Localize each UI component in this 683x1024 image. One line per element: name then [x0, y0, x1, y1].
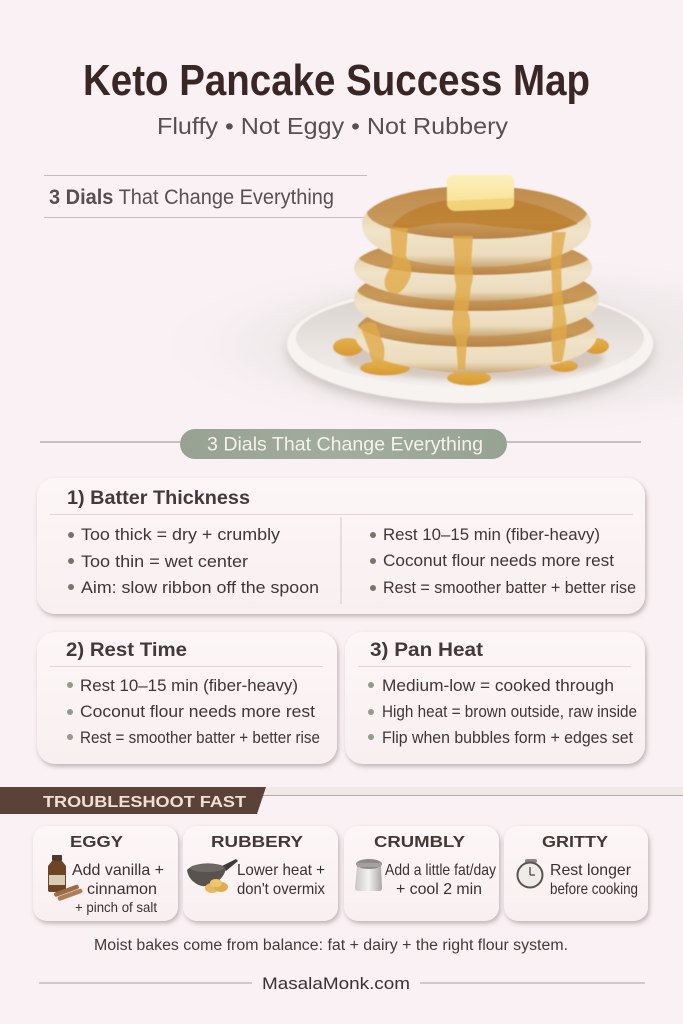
panel: rest time: 2) Rest Time — [66, 640, 187, 661]
pancake 4 — [355, 316, 598, 374]
syrup puddles — [333, 338, 609, 386]
footer: site name: MasalaMonk.com — [262, 974, 410, 993]
title: Keto Pancake Success Map — [83, 56, 590, 105]
pancake 3 — [354, 280, 600, 336]
card: rubbery: Lower heat + — [237, 862, 325, 879]
card: rubbery — [183, 826, 338, 921]
hero image: pancake stack on plate — [287, 175, 653, 403]
card: gritty: GRITTY — [542, 834, 608, 851]
panel: rest time: Rest 10–15 min (fiber-heavy) — [80, 677, 298, 695]
closing note: Moist bakes come from balance: fat + dairy + the right flour system. — [94, 937, 568, 954]
card: gritty — [504, 826, 648, 921]
card: crumbly: CRUMBLY — [374, 834, 465, 851]
panel: batter thickness: Coconut flour needs more rest — [383, 552, 614, 570]
card: eggy: + pinch of salt — [75, 899, 157, 915]
pancake 2 — [354, 248, 592, 302]
card: gritty: Rest longer — [550, 862, 632, 879]
panel: pan heat — [345, 632, 645, 764]
troubleshoot banner: TROUBLESHOOT FAST — [43, 794, 246, 811]
card: gritty: before cooking — [550, 881, 638, 898]
icon: timer — [518, 859, 542, 888]
icon: jar — [355, 859, 382, 891]
card: crumbly: + cool 2 min — [396, 881, 482, 898]
panel: batter thickness: Too thick = dry + crumbly — [81, 526, 281, 544]
panel: rest time — [37, 632, 337, 764]
panel: batter thickness: Too thin = wet center — [81, 553, 249, 571]
plate — [287, 285, 653, 403]
card: eggy — [33, 826, 178, 921]
icon: vanilla bottle and cinnamon — [48, 855, 83, 902]
section pill heading — [40, 429, 641, 459]
section pill heading: 3 Dials That Change Everything — [207, 434, 483, 456]
panel: pan heat: 3) Pan Heat — [370, 640, 484, 661]
icon: skillet with butter — [187, 859, 238, 893]
card: rubbery: RUBBERY — [211, 834, 303, 851]
panel: batter thickness: Rest = smoother batter + better rise — [383, 579, 636, 597]
card: eggy: Add vanilla + — [72, 862, 164, 879]
panel: pan heat: Medium-low = cooked through — [382, 677, 614, 695]
panel: batter thickness: Aim: slow ribbon off the spoon — [81, 579, 319, 597]
pancake 1 — [362, 185, 591, 267]
panel: rest time: Coconut flour needs more rest — [80, 703, 315, 721]
panel: batter thickness — [37, 478, 645, 614]
panel: pan heat: High heat = brown outside, raw inside — [382, 703, 637, 721]
troubleshoot banner — [0, 787, 683, 814]
card: rubbery: don't overmix — [237, 881, 325, 898]
panel: batter thickness: 1) Batter Thickness — [67, 488, 250, 509]
heading band: 3 dials: 3 Dials That Change Everything — [49, 185, 334, 209]
panel: pan heat: Flip when bubbles form + edges set — [382, 729, 633, 747]
subtitle: Fluffy • Not Eggy • Not Rubbery — [157, 113, 509, 139]
syrup drips — [360, 200, 578, 370]
butter pat — [447, 175, 514, 211]
panel: batter thickness: Rest 10–15 min (fiber-heavy) — [383, 526, 600, 544]
panel: rest time: Rest = smoother batter + better rise — [80, 729, 320, 747]
card: crumbly: Add a little fat/day — [385, 862, 496, 879]
card: eggy: EGGY — [70, 834, 123, 851]
card: eggy: cinnamon — [87, 881, 157, 898]
card: crumbly — [344, 826, 499, 921]
